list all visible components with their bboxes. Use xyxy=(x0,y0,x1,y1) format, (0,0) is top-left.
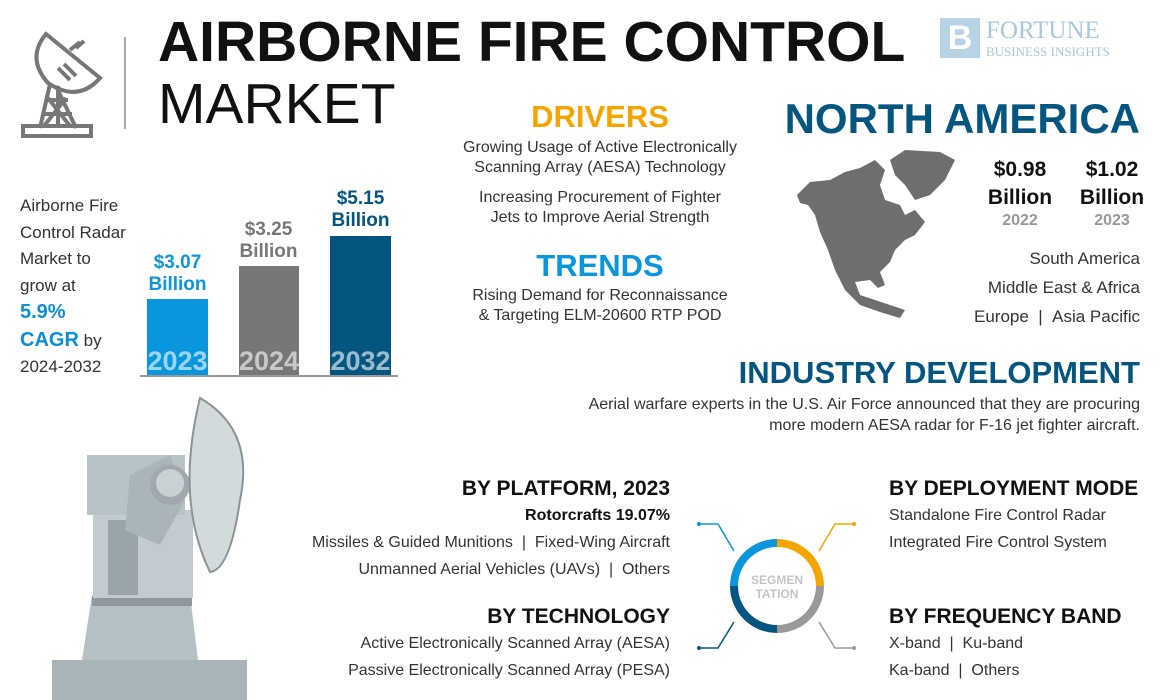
drivers: Jets to Improve Aerial Strength xyxy=(491,209,709,226)
segmentation ring: TATION xyxy=(756,587,798,601)
trends: Rising Demand for Reconnaissance xyxy=(472,287,728,304)
title: MARKET xyxy=(158,72,396,136)
industry development: Aerial warfare experts in the U.S. Air Force announced that they are procuring xyxy=(589,396,1140,413)
CAGR text: 2024-2032 xyxy=(20,357,101,376)
segment: by frequency band xyxy=(889,605,1122,679)
segment: by platform xyxy=(312,477,670,578)
segment: by frequency band: Ka-band | Others xyxy=(889,662,1019,679)
segment: by deployment mode: Integrated Fire Control System xyxy=(889,534,1107,551)
CAGR text: CAGR by xyxy=(20,328,102,350)
segment: by platform: Rotorcrafts 19.07% xyxy=(525,507,670,524)
logo: B xyxy=(948,19,972,57)
radar photo xyxy=(52,396,247,700)
text: 2023 xyxy=(1094,212,1130,229)
drivers xyxy=(463,99,737,226)
drivers: Increasing Procurement of Fighter xyxy=(479,189,721,206)
segment: by platform: Missiles & Guided Munitions | Fixed-Wing Aircraft xyxy=(312,534,670,551)
industry development xyxy=(588,355,1140,434)
drivers: Growing Usage of Active Electronically xyxy=(463,139,737,156)
CAGR text: Airborne Fire xyxy=(20,196,118,215)
segment: by deployment mode xyxy=(889,477,1138,551)
bar 2024: 2024 xyxy=(239,346,299,376)
segment: by frequency band: X-band | Ku-band xyxy=(889,635,1023,652)
text: $1.02 xyxy=(1086,158,1138,181)
segment: by frequency band: BY FREQUENCY BAND xyxy=(889,605,1122,628)
north america values: $0.98 xyxy=(994,158,1046,181)
north america heading: NORTH AMERICA xyxy=(785,95,1140,142)
segment: by platform: BY PLATFORM, 2023 xyxy=(462,477,670,500)
title: AIRBORNE FIRE CONTROL xyxy=(158,10,905,74)
bar 2023 xyxy=(147,299,208,375)
CAGR text: grow at xyxy=(20,276,76,294)
other regions: South America xyxy=(1029,249,1140,268)
bar 2032 xyxy=(330,236,391,375)
other regions: Europe | Asia Pacific xyxy=(974,307,1140,326)
bar chart: Billion xyxy=(331,210,390,231)
bar chart: $5.15 xyxy=(337,188,384,209)
segment: by technology: Passive Electronically Scanned Array (PESA) xyxy=(348,662,670,679)
north america values: 2022 xyxy=(1002,212,1038,229)
drivers: DRIVERS xyxy=(531,99,669,134)
bar 2023: 2023 xyxy=(147,346,208,376)
other regions: Middle East & Africa xyxy=(988,278,1140,297)
trends: & Targeting ELM-20600 RTP POD xyxy=(479,307,721,324)
bar chart xyxy=(140,188,398,377)
other regions xyxy=(974,249,1140,326)
segmentation ring: SEGMEN xyxy=(751,573,803,587)
divider xyxy=(124,37,126,129)
title xyxy=(158,10,905,136)
segment: by platform: Unmanned Aerial Vehicles (UAVs) | Others xyxy=(358,561,670,578)
CAGR text xyxy=(20,196,126,376)
trends xyxy=(472,248,728,324)
map: north america xyxy=(797,150,955,318)
north america values: Billion xyxy=(988,186,1052,209)
bar 2032: 2032 xyxy=(330,346,391,376)
CAGR text: 5.9% xyxy=(20,301,66,323)
segment: by technology: Active Electronically Scanned Array (AESA) xyxy=(361,635,670,652)
segment: by technology: BY TECHNOLOGY xyxy=(487,605,670,628)
bar 2024 xyxy=(239,266,299,375)
logo: FORTUNE xyxy=(986,17,1100,44)
segmentation ring xyxy=(697,522,856,650)
segment: by deployment mode: BY DEPLOYMENT MODE xyxy=(889,477,1138,500)
logo: BUSINESS INSIGHTS xyxy=(986,44,1110,59)
industry development: more modern AESA radar for F-16 jet fighter aircraft. xyxy=(769,417,1140,434)
bar chart: $3.07 xyxy=(154,252,201,273)
segment: by technology xyxy=(348,605,670,679)
icon: radar antenna xyxy=(21,31,103,138)
trends: TRENDS xyxy=(536,248,664,283)
bar chart: $3.25 xyxy=(245,219,292,240)
text: Billion xyxy=(1080,186,1144,209)
CAGR text: Control Radar xyxy=(20,222,126,242)
industry development: INDUSTRY DEVELOPMENT xyxy=(739,355,1140,390)
logo xyxy=(940,17,1110,59)
bar chart: Billion xyxy=(148,274,207,295)
north america values xyxy=(988,158,1052,229)
bar chart: Billion xyxy=(239,241,298,262)
segment: by deployment mode: Standalone Fire Control Radar xyxy=(889,507,1106,524)
CAGR text: Market to xyxy=(20,249,91,268)
drivers: Scanning Array (AESA) Technology xyxy=(474,159,726,176)
